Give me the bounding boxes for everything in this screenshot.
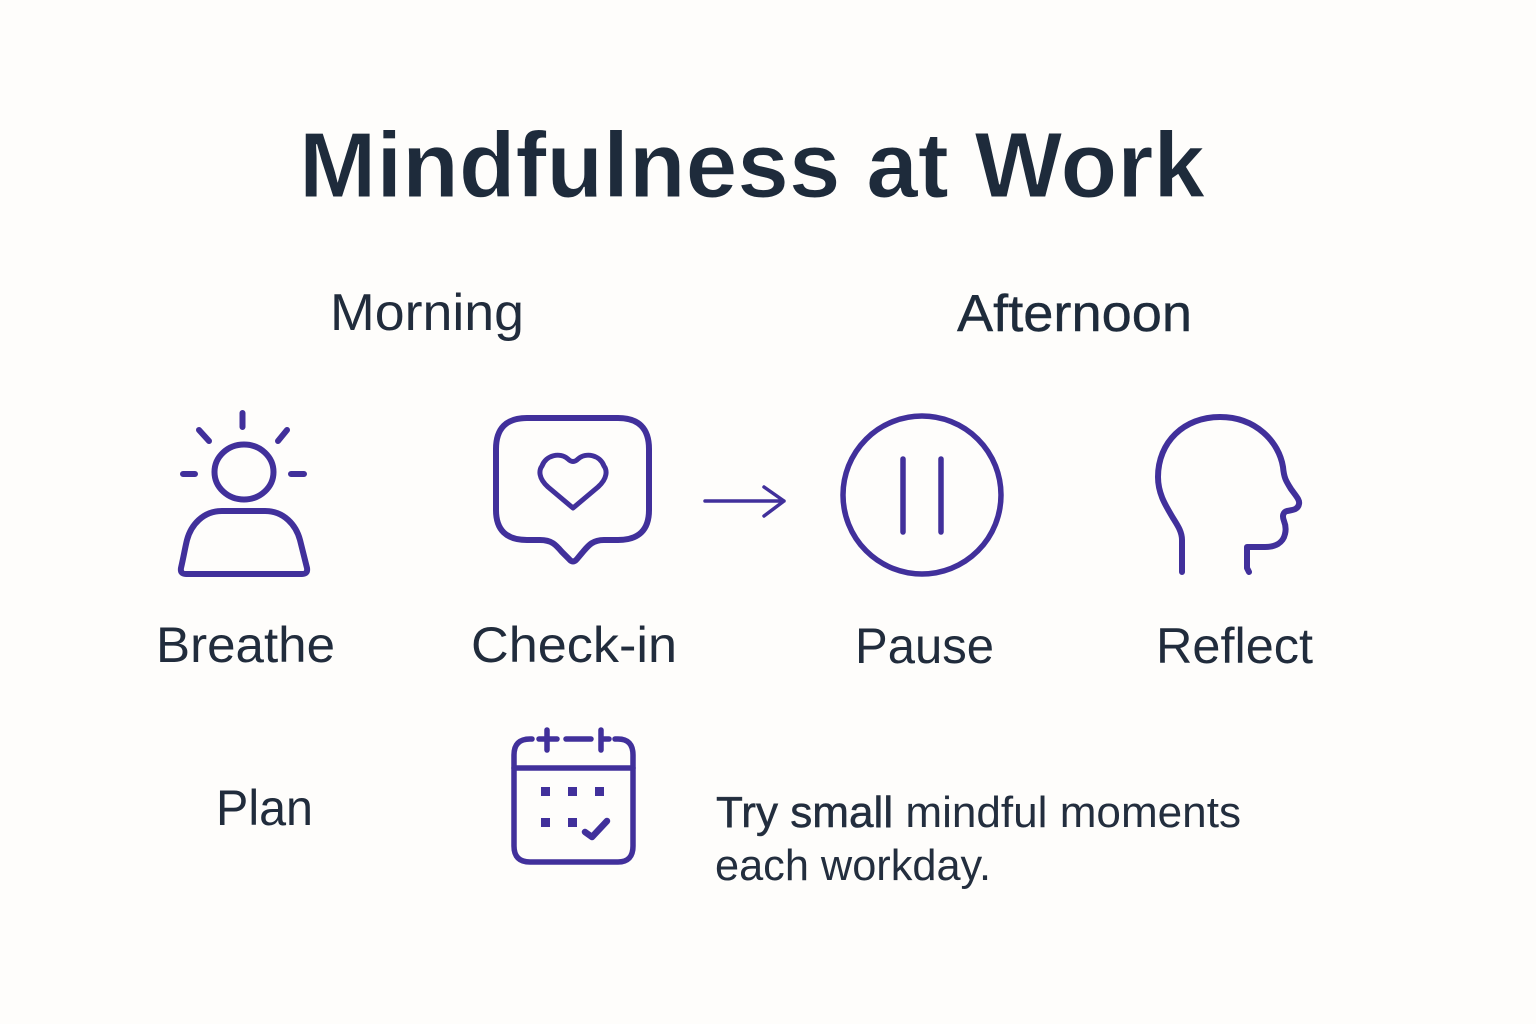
label: Reflect: Reflect <box>1156 618 1313 674</box>
arrow: check-in to pause <box>705 487 784 516</box>
icon: calendar date squares <box>541 787 604 827</box>
label: Check-in: Check-in <box>471 617 677 673</box>
title: Mindfulness at Work <box>299 113 1205 217</box>
closing message: Try small mindful moments <box>716 788 1241 837</box>
icon: pause <box>843 416 1001 574</box>
icon: check-in speech bubble with heart <box>496 418 649 562</box>
label: Plan: Plan <box>216 780 313 836</box>
label: Breathe: Breathe <box>156 617 335 673</box>
icon: calendar <box>514 730 633 862</box>
closing message: each workday. <box>715 841 991 890</box>
heading: Afternoon: Afternoon <box>957 285 1192 343</box>
label: Pause: Pause <box>855 618 994 674</box>
closing message <box>715 788 1241 890</box>
icon: breathe person with sun <box>181 413 307 574</box>
heading: Morning: Morning <box>330 284 524 342</box>
icon: reflect head profile <box>1158 417 1299 572</box>
